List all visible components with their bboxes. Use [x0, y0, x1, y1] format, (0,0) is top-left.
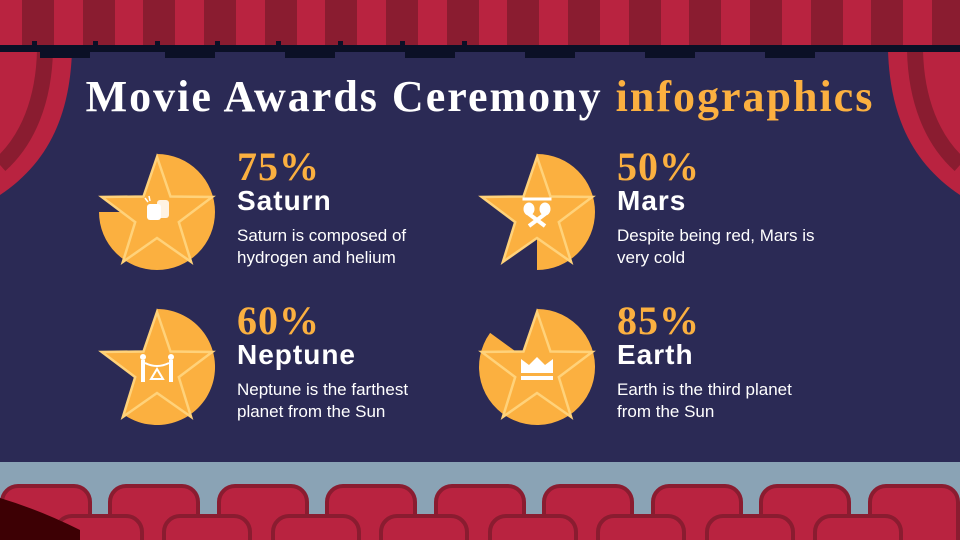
text: Earth: Earth — [617, 339, 694, 370]
side curtain right — [888, 50, 960, 195]
text: Saturn: Saturn — [237, 185, 332, 216]
text: Saturn — [237, 144, 406, 267]
curtain stripes top — [0, 0, 960, 50]
icon: crossed microphones — [523, 198, 551, 226]
chart: Mars star pie — [478, 153, 596, 270]
text: Earth — [617, 298, 792, 421]
chart: Earth star pie — [478, 308, 596, 425]
text: Mars: 50% — [617, 144, 700, 189]
side curtain left — [0, 50, 72, 195]
text: Neptune: 60% — [237, 298, 320, 343]
text: Neptune: Neptune is the farthest planet from the Sun — [237, 380, 408, 421]
text: Saturn: 75% — [237, 144, 320, 189]
text: Saturn: Saturn is composed of hydrogen and helium — [237, 226, 406, 267]
icon: clapping hands — [145, 196, 169, 220]
text: Earth: 85% — [617, 298, 700, 343]
text: Neptune — [237, 298, 408, 421]
seats front row — [56, 516, 901, 540]
chart: Saturn star pie — [98, 153, 216, 270]
text: Neptune: Neptune — [237, 339, 356, 370]
text: Mars: Despite being red, Mars is very cold — [617, 226, 814, 267]
icon: stanchions — [140, 354, 174, 382]
seats back row — [2, 486, 958, 540]
text: Mars: Mars — [617, 185, 686, 216]
title: Movie Awards Ceremony infographics — [86, 72, 874, 121]
text: Earth: Earth is the third planet from the Sun — [617, 380, 792, 421]
chart: Neptune star pie — [98, 308, 216, 425]
floor — [0, 462, 960, 540]
text: Mars — [617, 144, 814, 267]
valance edge — [0, 41, 960, 52]
icon: crown — [521, 357, 553, 380]
